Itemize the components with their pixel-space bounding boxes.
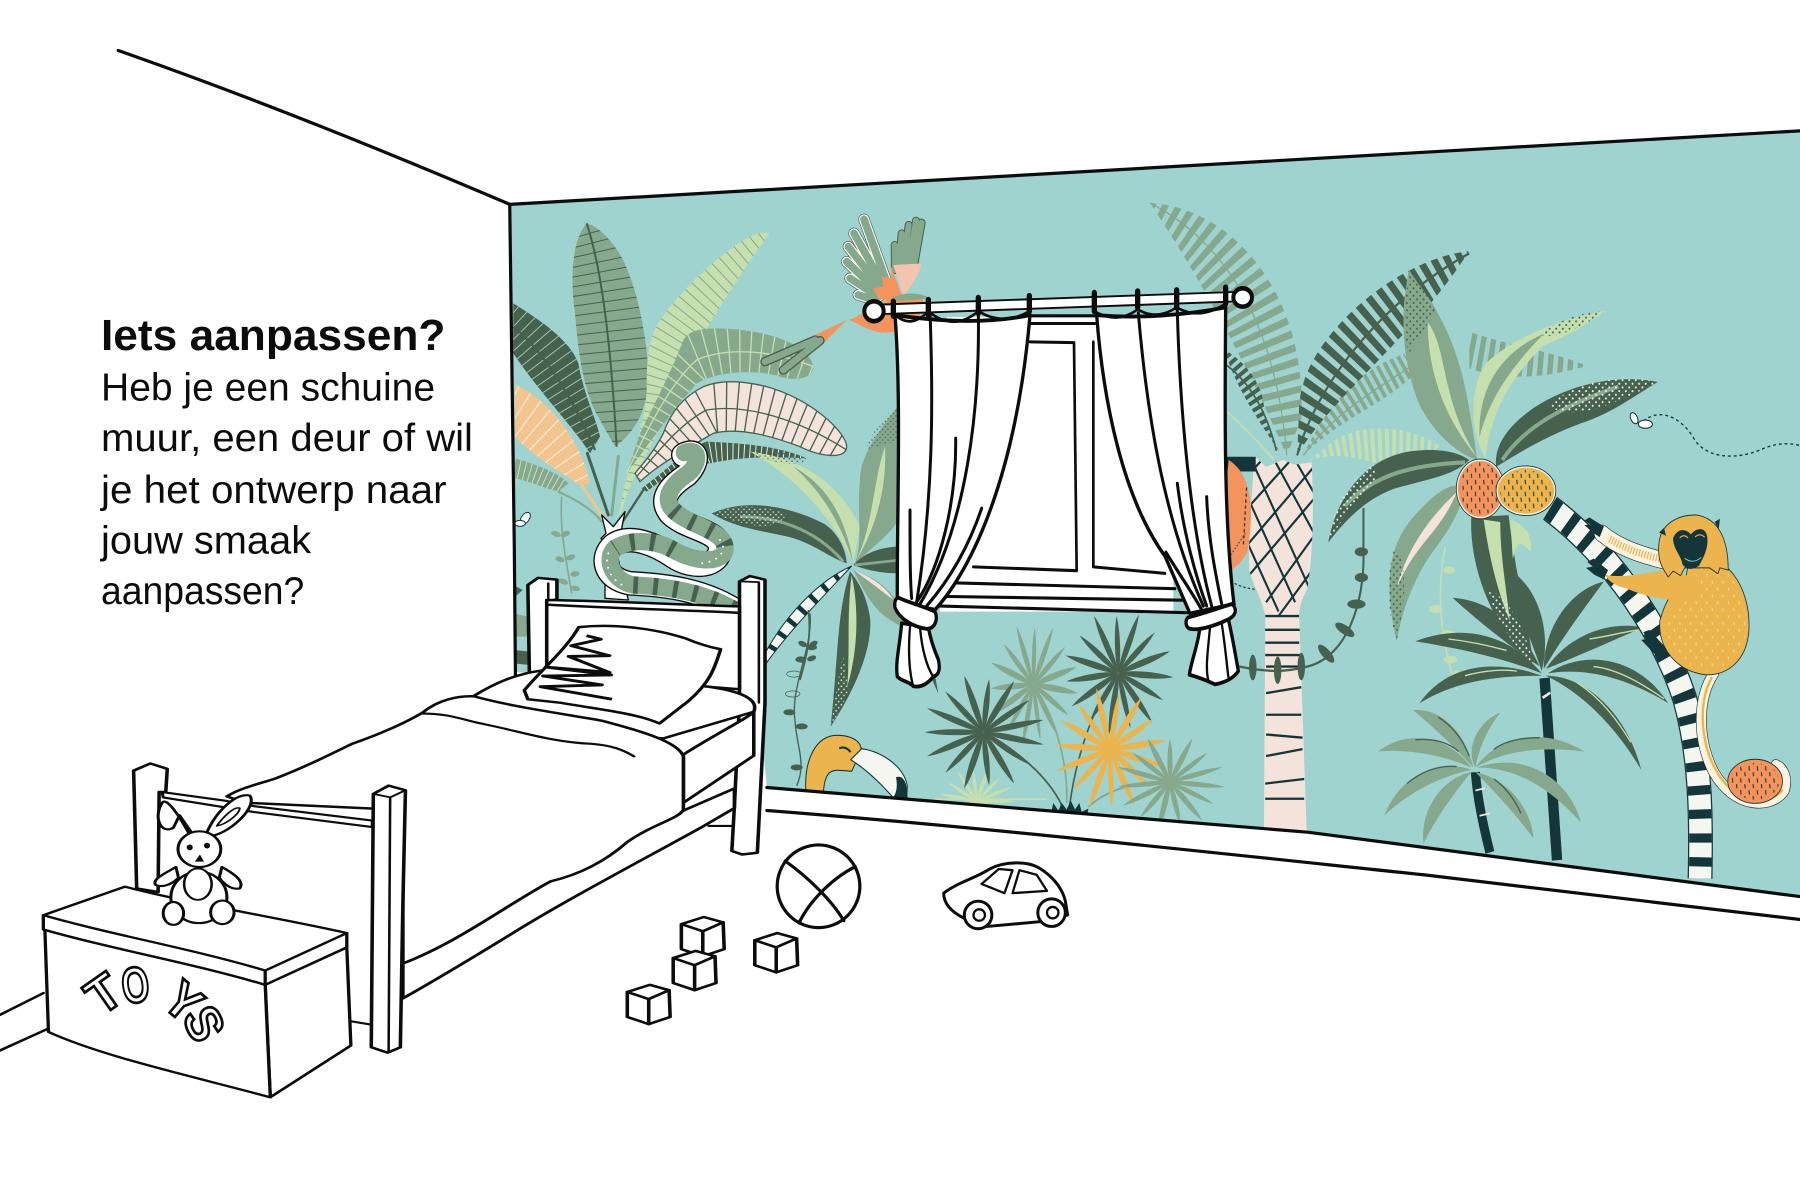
sage palm crown <box>1378 710 1584 843</box>
sage arched banana leaf <box>627 328 813 473</box>
orange animal behind tree <box>1220 457 1256 575</box>
monkey foot <box>1641 630 1666 657</box>
right curtain <box>1097 307 1234 614</box>
left banana plants <box>507 219 930 680</box>
light green frond <box>1310 444 1440 460</box>
leaves behind bed head <box>516 586 528 665</box>
palm leaf up right <box>1473 311 1606 458</box>
bunny arms <box>155 867 241 889</box>
small sage leaf <box>513 458 568 492</box>
headboard <box>547 600 740 689</box>
bird shoulder <box>873 263 902 303</box>
bird right wing <box>895 221 922 270</box>
monkey upper hand <box>1584 517 1604 537</box>
butterfly <box>1629 411 1652 428</box>
monkey lower arm <box>1605 570 1699 601</box>
post highlight <box>548 581 759 703</box>
left floor line bottom <box>0 1029 48 1050</box>
car wheels <box>964 899 1065 929</box>
rod knob right <box>1233 288 1252 307</box>
right curtain folds <box>1138 311 1222 610</box>
light green fan palm <box>939 768 1015 836</box>
monkey head <box>1659 515 1728 577</box>
palm leaf right <box>1496 378 1658 467</box>
flamingo eye <box>839 747 851 752</box>
ceiling line left <box>118 51 510 204</box>
sage palm veins <box>1407 717 1540 813</box>
flamingo <box>806 735 907 799</box>
mustard coconut <box>1496 466 1556 516</box>
chest front <box>45 929 270 1097</box>
palm leaf down <box>1471 515 1533 664</box>
pale leaf sprig <box>1511 520 1531 559</box>
pillow scribble <box>541 636 612 699</box>
monkey ears <box>1659 519 1720 536</box>
main coordinate items <box>75 312 1068 1050</box>
stems <box>557 452 644 524</box>
right palms and monkey <box>1150 203 1800 879</box>
text block <box>100 312 473 613</box>
bird tail <box>765 320 847 370</box>
dashed trail behind tree <box>1227 578 1256 589</box>
bunny head <box>178 831 221 867</box>
block left <box>627 985 670 1024</box>
flamingo beak tip <box>893 777 907 799</box>
right curtain tail <box>1189 619 1238 684</box>
bunny ears <box>158 802 193 835</box>
sage fan palm <box>983 615 1084 756</box>
toy chest <box>43 887 351 1097</box>
pale hanging vine <box>1429 547 1461 689</box>
hanging vine <box>550 497 580 593</box>
dark arched leaf <box>642 442 807 492</box>
dark palm trunk <box>1545 678 1557 860</box>
bed and toys <box>43 576 798 1097</box>
bunny feet <box>163 902 184 925</box>
orange coconut <box>1456 459 1504 519</box>
flying bird <box>765 219 930 370</box>
right curtain tie <box>1186 604 1235 629</box>
window <box>937 316 1190 613</box>
palm leaf up <box>1403 270 1477 460</box>
dashed flight path <box>1643 415 1800 456</box>
wall background <box>511 132 1800 895</box>
toys lettering: T <box>75 961 133 1026</box>
block right <box>755 933 798 972</box>
sage lower frond <box>1303 366 1411 455</box>
dark vine <box>1239 508 1368 684</box>
sage fan palm small <box>1110 731 1230 835</box>
monkey lower hand <box>1586 559 1608 579</box>
dark vine near post <box>798 610 818 680</box>
bed frame rail <box>403 788 734 998</box>
blanket <box>227 696 683 963</box>
left floor line top <box>0 993 44 1015</box>
rod rings <box>893 288 1226 316</box>
palm cluster <box>712 403 903 665</box>
left curtain <box>895 311 1030 610</box>
small butterfly <box>516 512 531 527</box>
window and curtains <box>864 288 1252 687</box>
body text: Heb je een schuine <box>101 367 435 410</box>
dark fern frond <box>1297 253 1469 455</box>
monkey body <box>1660 558 1749 675</box>
right tail folds <box>1207 623 1228 681</box>
upper left palm leaf <box>750 451 860 563</box>
sage frond behind palm <box>1469 350 1587 366</box>
car windows <box>982 869 1047 893</box>
dark palm crown <box>1415 570 1668 770</box>
pillow <box>524 626 721 724</box>
dark curtain side leaf <box>927 629 938 694</box>
dark fan palm left <box>911 664 1056 803</box>
chest right side <box>265 947 351 1097</box>
peach banana leaf <box>510 385 590 485</box>
bunny eyes and nose <box>187 843 210 862</box>
rod knob left <box>864 301 884 321</box>
left tail folds <box>909 627 933 684</box>
head right post <box>732 576 765 855</box>
baseboard upper line <box>767 788 1800 897</box>
curtain scallops <box>893 304 1226 322</box>
wall top line <box>510 131 1800 204</box>
palm leaf hanging down <box>831 571 870 726</box>
mustard fan palm <box>1041 673 1180 828</box>
pale frond stem <box>1225 410 1274 460</box>
body text <box>100 367 473 613</box>
pink banana leaf <box>635 382 847 482</box>
heading: Iets aanpassen? <box>101 312 445 360</box>
sage stems <box>1037 690 1170 807</box>
flamingo neck <box>806 735 861 793</box>
under bed strip <box>351 826 734 1025</box>
patterned pink trunk <box>1241 455 1324 832</box>
toys lettering: S <box>171 997 236 1050</box>
bird left wing <box>847 219 888 300</box>
block stacked top <box>681 917 724 956</box>
flamingo beak <box>851 749 907 799</box>
toys lettering: Y <box>153 970 214 1034</box>
chest lid edge <box>43 915 347 985</box>
zebra trunk <box>765 566 852 665</box>
right dark palm leaf <box>853 547 900 573</box>
bird body <box>848 299 924 333</box>
sage palm trunk <box>1475 772 1490 852</box>
second vine <box>783 614 817 786</box>
small dark frond <box>1225 350 1278 451</box>
foot right post <box>371 786 405 1053</box>
dark fan palm right <box>1060 608 1177 740</box>
body text: muur, een deur of wil <box>101 417 473 460</box>
baseboard lower line <box>767 810 1800 920</box>
plant base <box>601 512 628 600</box>
body text: jouw smaak <box>100 519 312 562</box>
mattress <box>459 671 755 803</box>
car body <box>944 863 1068 926</box>
block stacked bottom <box>673 951 716 990</box>
left curtain tie <box>895 597 936 629</box>
light green banana leaf <box>620 233 770 508</box>
tall sage banana leaf <box>572 223 648 447</box>
blanket fold <box>422 714 634 756</box>
foot rail <box>162 792 372 827</box>
ball <box>777 845 860 928</box>
monkey upper arm <box>1602 533 1662 560</box>
curtain rod <box>864 288 1252 321</box>
stems of fan palms <box>985 675 1117 805</box>
monkey tail <box>1701 673 1786 803</box>
mural wall <box>511 132 1800 895</box>
dark banana leaf <box>507 303 600 453</box>
bunny tummy <box>184 868 212 900</box>
room corner line <box>510 204 515 677</box>
spiky plant base <box>1051 800 1088 820</box>
toy car <box>944 863 1068 929</box>
lower plants and flamingo <box>783 571 1230 836</box>
body text: aanpassen? <box>101 570 304 613</box>
bunny body <box>171 872 227 923</box>
monkey face <box>1673 529 1708 569</box>
left curtain tail <box>897 623 939 687</box>
window frame <box>940 317 1173 612</box>
left curtain folds <box>910 311 982 606</box>
snake <box>606 451 740 613</box>
toy blocks <box>627 917 798 1024</box>
palm leaf left <box>1328 450 1469 543</box>
lower sage palm leaf <box>853 570 903 627</box>
main palm crown <box>1328 270 1658 664</box>
toys lettering <box>75 957 236 1050</box>
foot left post <box>134 763 167 892</box>
window panes <box>937 316 1190 613</box>
light stem <box>933 797 1047 801</box>
upward palm leaf <box>855 403 900 563</box>
bird wing base <box>893 263 922 295</box>
monkey <box>1584 515 1786 803</box>
bird back <box>890 294 930 301</box>
tail ball <box>1728 759 1783 803</box>
toys lettering: O <box>118 957 153 1016</box>
left dark palm leaf <box>712 505 847 563</box>
sage lower palm <box>1378 710 1584 852</box>
palm leaf lower left <box>1389 485 1463 641</box>
chest lid <box>43 887 347 985</box>
zebra palm trunk <box>1550 508 1701 879</box>
head left post <box>528 578 557 674</box>
dark lower palm <box>1415 570 1668 860</box>
bunny <box>155 795 251 925</box>
dark palm highlights <box>1448 630 1664 742</box>
sage fern frond <box>1150 203 1302 455</box>
body text: je het ontwerp naar <box>100 469 447 512</box>
